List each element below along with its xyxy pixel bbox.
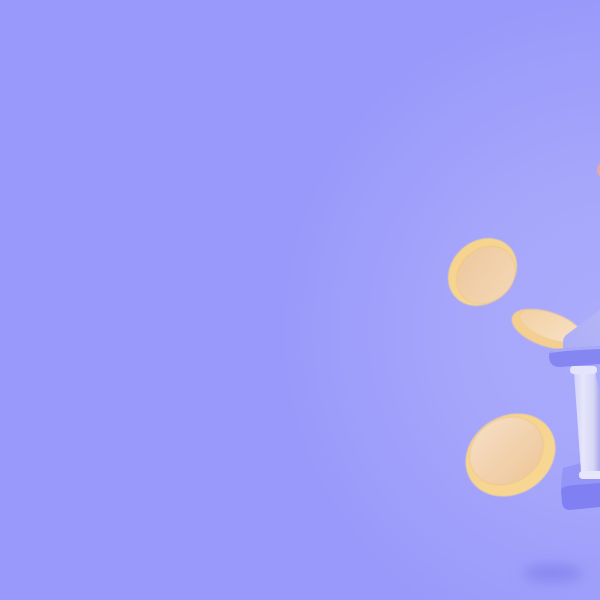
coin: lower left xyxy=(450,397,571,513)
column xyxy=(574,371,600,472)
coin: middle, seen edge-on xyxy=(506,301,586,357)
coin: pink, clipped at right edge xyxy=(597,161,600,179)
coin: upper left xyxy=(434,224,531,320)
ground shadow xyxy=(523,566,583,580)
entablature xyxy=(549,346,600,367)
plinth upper face xyxy=(561,463,600,490)
column capital xyxy=(570,366,597,374)
roof xyxy=(563,310,600,350)
bank building xyxy=(549,310,600,510)
column base xyxy=(579,471,600,479)
plinth front face xyxy=(561,483,600,510)
